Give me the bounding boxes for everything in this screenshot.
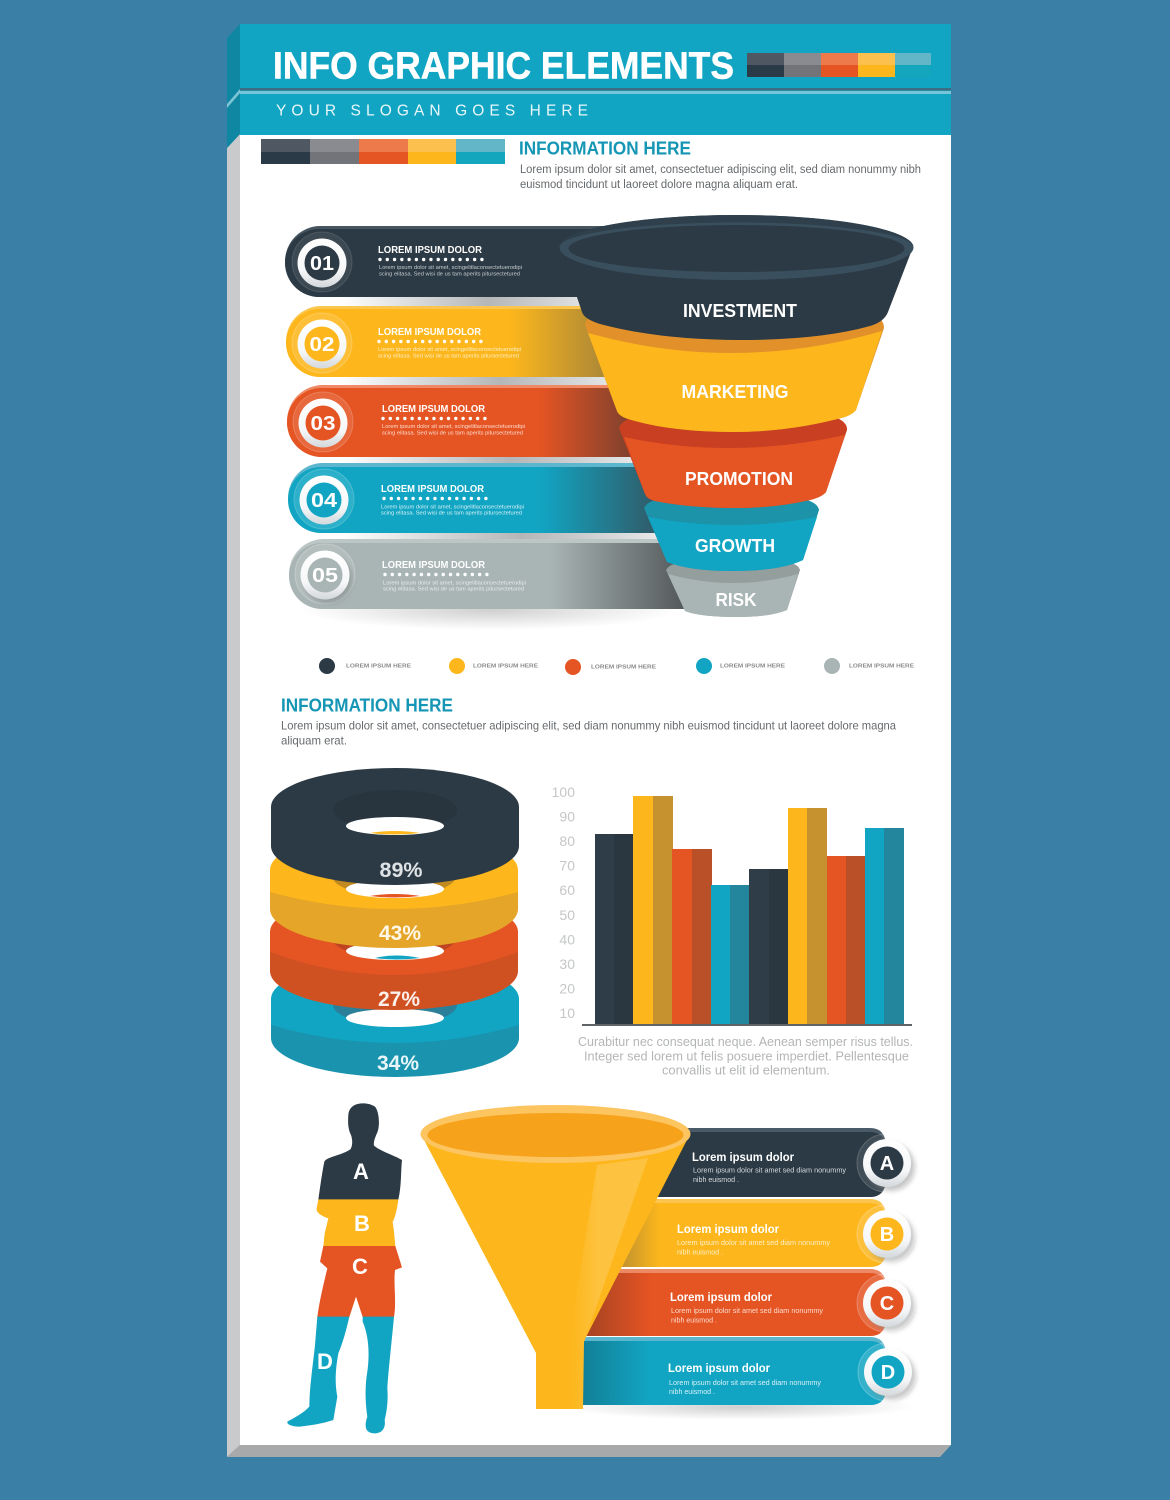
tab C: nibh euismod . (671, 1316, 717, 1324)
ribbon 03 (287, 385, 737, 457)
tab C: Lorem ipsum dolor sit amet sed diam nonummy (671, 1306, 823, 1315)
tab A: Lorem ipsum dolor sit amet sed diam nonummy (693, 1166, 846, 1174)
header colour swatches (747, 53, 931, 77)
funnel level: marketing: MARKETING (682, 382, 788, 402)
ring: 89%: 89% (380, 859, 423, 882)
ring: 27% (270, 893, 518, 1011)
ring: 43% (270, 831, 518, 948)
bar chart (552, 784, 913, 1078)
y axis labels: 60 (559, 882, 575, 898)
tab D: Lorem ipsum dolor sit amet sed diam nonummy (669, 1378, 821, 1387)
header banner (240, 24, 951, 135)
y axis labels: 30 (559, 956, 575, 972)
ribbon 03: scing elitasa. Sed wisi de us tam aperits pitursectetured (382, 430, 523, 436)
funnel level: promotion (619, 415, 847, 508)
separators between ribbons (340, 297, 670, 539)
tab A: Lorem ipsum dolor (692, 1150, 794, 1164)
intro colour swatches (261, 139, 505, 164)
tab C: Lorem ipsum dolor (670, 1290, 772, 1304)
ribbon 05: Lorem ipsum dolor sit amet, scingelitlaconsectetuerodipi (383, 580, 526, 586)
ribbon 01: Lorem ipsum dolor sit amet, scingelitlaconsectetuerodipi (379, 265, 522, 271)
y axis labels: 10 (559, 1005, 575, 1021)
ribbon 02: 02 (310, 334, 334, 356)
tab B: nibh euismod . (677, 1248, 723, 1256)
chart caption (578, 1034, 913, 1078)
funnel level: risk: RISK (716, 590, 756, 610)
legend: LOREM IPSUM HERE (591, 664, 656, 670)
ribbon 03: LOREM IPSUM DOLOR (382, 404, 486, 415)
ribbon 05: 05 (312, 565, 338, 587)
person silhouette: A (353, 1159, 369, 1184)
ribbon 02 (286, 306, 736, 377)
ribbon 01: scing elitasa. Sed wisi de us tam aperits pitursectetured (379, 272, 520, 278)
ring: 34%: 34% (377, 1052, 419, 1075)
ring: 43%: 43% (379, 922, 421, 945)
tab C (570, 1269, 915, 1336)
ribbon 01: LOREM IPSUM DOLOR (378, 245, 483, 256)
ribbon 04: 04 (311, 490, 338, 512)
y axis labels (552, 784, 575, 1021)
person silhouette: D (317, 1349, 333, 1374)
heading: information here (middle): Lorem ipsum dolor sit amet, consectetuer adipiscing elit, sed diam nonummy nibh euismod tincidunt ut laoreet dolore magna (281, 718, 896, 732)
ribbon 02: LOREM IPSUM DOLOR (378, 327, 482, 338)
ring: 34% (271, 960, 519, 1077)
ribbon 05 (289, 539, 739, 609)
heading: information here (middle) (281, 696, 896, 748)
heading: information here (top): Lorem ipsum dolor sit amet, consectetuer adipiscing elit, sed diam nonummy nibh (520, 164, 921, 176)
chart caption: Curabitur nec consequat neque. Aenean semper risus tellus. (578, 1034, 913, 1049)
funnel level: investment (560, 215, 914, 340)
tab A: A (880, 1153, 894, 1175)
tab B: Lorem ipsum dolor sit amet sed diam nonummy (677, 1238, 830, 1247)
funnel level: risk (666, 562, 800, 617)
tab B: B (880, 1224, 894, 1246)
ribbon 05: LOREM IPSUM DOLOR (382, 560, 486, 571)
tab D: Lorem ipsum dolor (668, 1361, 770, 1375)
legend: LOREM IPSUM HERE (346, 664, 411, 670)
ribbon 04: scing elitasa. Sed wisi de us tam aperits pitursectetured (381, 510, 522, 516)
funnel level: growth (644, 498, 819, 571)
ribbon 05: scing elitasa. Sed wisi de us tam aperits pitursectetured (383, 586, 524, 592)
large yellow funnel (420, 1105, 690, 1409)
chart caption: Integer sed lorem ut felis posuere imperdiet. Pellentesque (584, 1048, 909, 1064)
tab A (640, 1128, 915, 1197)
ribbon 04 (288, 463, 738, 533)
shadow under tabs (565, 1394, 915, 1420)
ring: 27%: 27% (378, 988, 420, 1011)
funnel level: growth: GROWTH (695, 536, 775, 556)
y axis labels: 90 (559, 808, 575, 824)
heading: information here (top) (519, 138, 921, 191)
tab C: C (880, 1293, 894, 1315)
y axis labels: 40 (559, 932, 575, 948)
ribbon 03: Lorem ipsum dolor sit amet, scingelitlaconsectetuerodipi (382, 424, 525, 430)
ring stack chart (270, 768, 519, 1077)
tab D: nibh euismod . (669, 1387, 715, 1396)
ribbon 02: scing elitasa. Sed wisi de us tam aperits pitursectetured (378, 354, 519, 360)
tab D: D (881, 1362, 895, 1384)
ribbon 01: 01 (310, 253, 334, 275)
shadow under ribbon stack (300, 590, 680, 630)
funnel level: promotion: PROMOTION (685, 469, 793, 489)
ribbon 01 (285, 226, 735, 297)
person silhouette (287, 1103, 402, 1433)
heading: information here (middle): INFORMATION HERE (281, 696, 453, 716)
person silhouette: C (352, 1254, 368, 1279)
person silhouette: B (354, 1211, 370, 1236)
y axis labels: 100 (552, 784, 575, 800)
ribbon 02: Lorem ipsum dolor sit amet, scingelitlaconsectetuerodipi (378, 347, 521, 353)
ribbon 04: LOREM IPSUM DOLOR (381, 484, 485, 495)
ribbon 03: 03 (310, 413, 336, 435)
tab B (600, 1199, 915, 1267)
y axis labels: 70 (559, 858, 575, 874)
page sheet with 3D edges (227, 24, 951, 1457)
title: INFO GRAPHIC ELEMENTS (273, 46, 734, 88)
tab A: nibh euismod . (693, 1175, 739, 1184)
funnel level: marketing (585, 312, 884, 432)
ribbon 04: Lorem ipsum dolor sit amet, scingelitlaconsectetuerodipi (381, 504, 524, 510)
legend: LOREM IPSUM HERE (473, 664, 538, 670)
legend: LOREM IPSUM HERE (720, 664, 785, 670)
chart caption: convallis ut elit id elementum. (662, 1062, 830, 1078)
heading: information here (middle): aliquam erat. (281, 734, 347, 748)
y axis labels: 20 (559, 980, 575, 996)
slogan: YOUR SLOGAN GOES HERE (276, 102, 588, 120)
y axis labels: 50 (559, 907, 575, 923)
legend (319, 658, 914, 675)
legend: LOREM IPSUM HERE (849, 664, 914, 670)
heading: information here (top): INFORMATION HERE (519, 138, 691, 158)
tab D (570, 1337, 916, 1405)
bars (595, 796, 904, 1025)
y axis labels: 80 (559, 833, 575, 849)
heading: information here (top): euismod tincidunt ut laoreet dolore magna aliquam erat. (520, 179, 798, 191)
ring: 89% (271, 768, 519, 885)
funnel level: investment: INVESTMENT (683, 301, 797, 321)
tab B: Lorem ipsum dolor (677, 1222, 779, 1236)
